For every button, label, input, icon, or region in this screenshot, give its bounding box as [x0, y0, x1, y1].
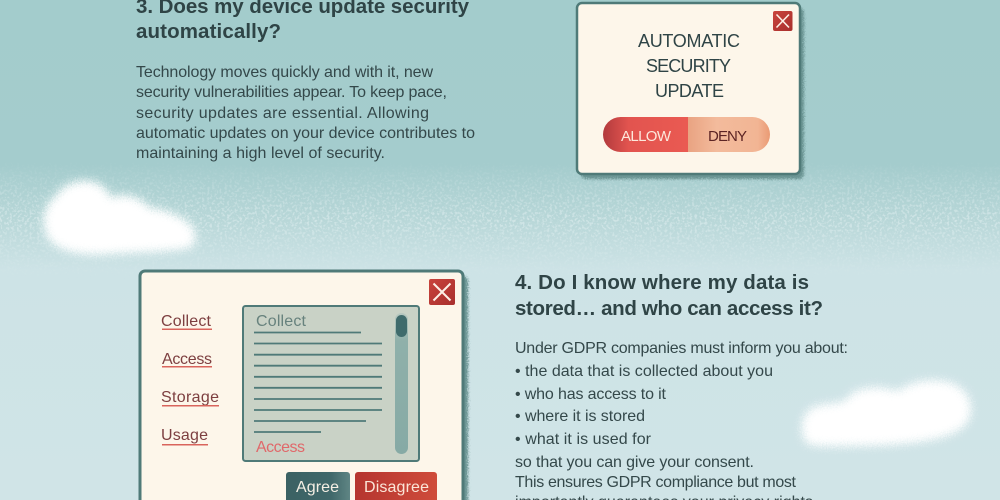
heading: section 3 — [136, 0, 470, 43]
panel shadow — [145, 276, 468, 500]
button: Disagree — [355, 472, 437, 500]
heading: section 4 — [515, 271, 823, 320]
icon: close button — [773, 11, 792, 31]
background: sky gradient — [0, 0, 1000, 256]
text block: section 4 body: Under GDPR companies must inform you about: — [515, 340, 848, 357]
text block: section 4 body: so that you can give your consent. — [515, 454, 754, 471]
link: Usage: Usage — [161, 427, 208, 444]
text block: section 4 body — [515, 340, 848, 500]
heading: section 4: stored… and who can access it? — [515, 297, 823, 320]
link: Collect: Collect — [161, 313, 212, 330]
link: Storage: Storage — [161, 389, 219, 406]
terms scroll box: Access — [256, 439, 305, 456]
heading: section 3: automatically? — [136, 20, 281, 43]
link: Access: Access — [162, 351, 212, 368]
toggle: allow / deny: ALLOW — [621, 128, 672, 145]
text block: section 3 body — [136, 64, 475, 162]
text block: section 4 body: • the data that is collected about you — [515, 363, 773, 380]
cloud: right — [802, 380, 971, 446]
dialog title: UPDATE — [655, 81, 724, 101]
text block: section 3 body: security updates are essential. Allowing — [136, 105, 429, 122]
panel shadow — [581, 8, 804, 179]
text block: section 3 body: automatic updates on your device contributes to — [136, 125, 475, 142]
scrollbar — [395, 313, 408, 454]
panel body — [140, 271, 463, 500]
button: Disagree: Disagree — [364, 479, 429, 496]
heading: section 4: 4. Do I know where my data is — [515, 271, 809, 294]
panel: data consent dialog — [140, 271, 468, 500]
cloud: left — [44, 181, 195, 254]
text block: section 3 body: Technology moves quickly and with it, new — [136, 64, 433, 81]
toggle: allow / deny: DENY — [708, 128, 747, 145]
dialog title — [638, 31, 740, 101]
button: Agree: Agree — [296, 479, 339, 496]
text block: section 4 body: • what it is used for — [515, 431, 652, 448]
terms scroll box: Collect — [256, 313, 307, 330]
text block: section 4 body: • who has access to it — [515, 386, 667, 403]
dialog title: AUTOMATIC — [638, 31, 740, 51]
text block: section 3 body: security vulnerabilities appear. To keep pace, — [136, 84, 447, 101]
terms scroll box — [243, 306, 419, 461]
panel body — [577, 3, 800, 174]
dialog title: SECURITY — [646, 56, 731, 76]
panel: automatic security update dialog — [577, 3, 804, 179]
toggle: allow / deny — [603, 117, 770, 152]
button: Agree — [286, 472, 350, 500]
text block: section 3 body: maintaining a high level of security. — [136, 145, 385, 162]
text block: section 4 body: • where it is stored — [515, 408, 645, 425]
icon: close button — [429, 279, 455, 305]
text block: section 4 body: This ensures GDPR compliance but most — [515, 474, 797, 491]
